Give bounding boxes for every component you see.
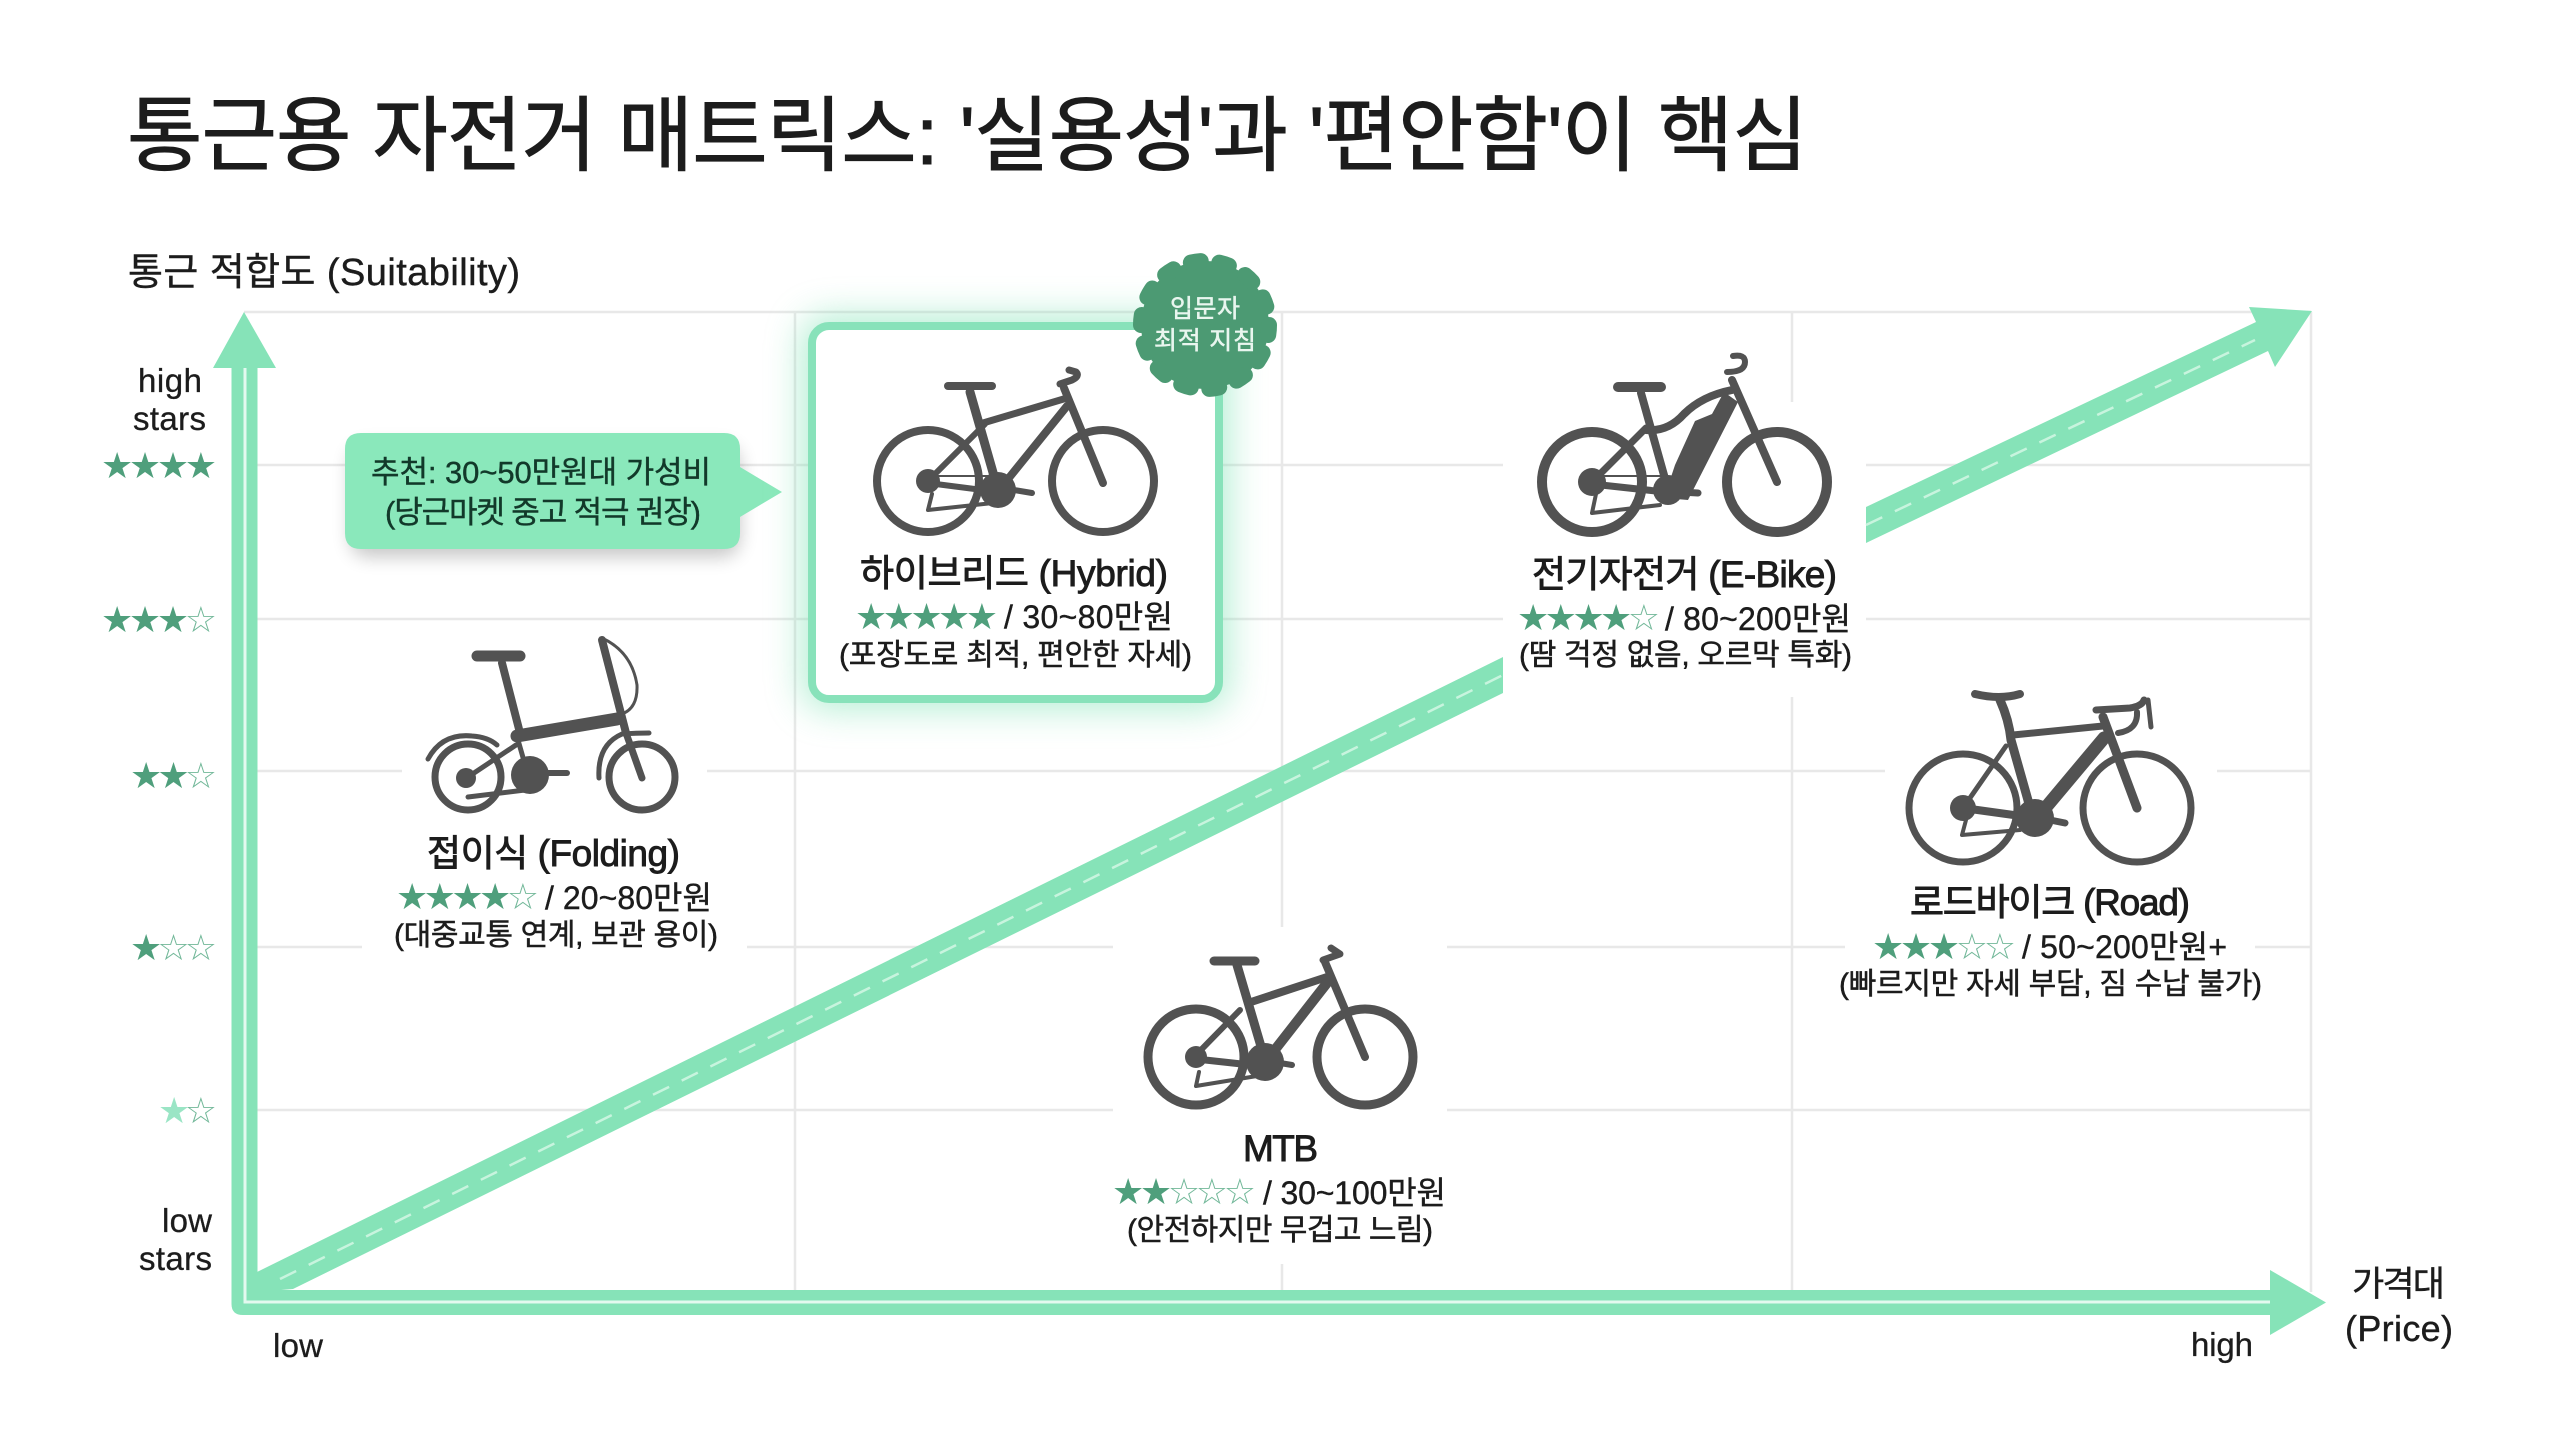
y axis high label	[133, 362, 206, 437]
folding rating and price	[396, 877, 712, 918]
hybrid description: (포장도로 최적, 편안한 자세)	[839, 639, 1192, 672]
road rating and price	[1872, 927, 2227, 968]
y axis star scale: ★☆	[158, 1091, 217, 1132]
y axis star scale	[101, 446, 217, 1132]
hybrid rating and price: ★★★★★	[855, 597, 998, 638]
hybrid rating and price	[855, 597, 1173, 638]
x axis low label: low	[273, 1327, 323, 1364]
y axis star scale: ★☆☆	[130, 928, 217, 969]
road rating and price: / 50~200만원+	[2022, 929, 2227, 965]
diagonal trend arrow: lower segment	[257, 657, 1503, 1292]
folding description: (대중교통 연계, 보관 용이)	[394, 919, 718, 952]
callout: recommendation: (당근마켓 중고 적극 권장)	[385, 495, 701, 530]
MTB name: MTB	[1243, 1128, 1318, 1169]
icon: e-bike	[1542, 356, 1827, 532]
panel: road bike	[1839, 694, 2262, 1001]
y axis title: 통근 적합도 (Suitability)	[128, 252, 520, 294]
badge: beginner pick: 입문자	[1170, 295, 1240, 323]
hybrid name: 하이브리드 (Hybrid)	[860, 553, 1168, 594]
panel: hybrid highlighted card	[802, 316, 1229, 709]
e-bike rating and price: ★★★★☆	[1517, 598, 1660, 639]
title: 통근용 자전거 매트릭스: '실용성'과 '편안함'이 핵심	[127, 91, 1808, 182]
MTB rating and price: ★★☆☆☆	[1112, 1172, 1256, 1213]
e-bike rating and price: / 80~200만원	[1665, 601, 1851, 637]
y axis star scale: ★★★★	[101, 446, 217, 487]
folding name: 접이식 (Folding)	[427, 833, 680, 874]
panel: e-bike	[1517, 356, 1852, 672]
panel: MTB	[1112, 948, 1446, 1247]
icon: road bike	[1909, 694, 2191, 862]
e-bike rating and price	[1517, 598, 1851, 639]
folding rating and price: ★★★★☆	[396, 877, 539, 918]
y axis arrow	[213, 312, 2326, 1335]
MTB rating and price	[1112, 1172, 1446, 1213]
x axis high label: high	[2191, 1326, 2253, 1363]
icon: hybrid bike	[877, 370, 1154, 532]
MTB description: (안전하지만 무겁고 느림)	[1127, 1214, 1433, 1247]
badge: beginner pick	[1141, 261, 1269, 389]
x axis title	[2345, 1265, 2453, 1349]
road rating and price: ★★★☆☆	[1872, 927, 2016, 968]
e-bike name: 전기자전거 (E-Bike)	[1532, 554, 1837, 595]
MTB rating and price: / 30~100만원	[1263, 1175, 1446, 1211]
road description: (빠르지만 자세 부담, 짐 수납 불가)	[1839, 968, 2262, 1001]
folding rating and price: / 20~80만원	[545, 880, 712, 916]
panel: folding bike	[394, 638, 718, 952]
badge: beginner pick: 최적 지침	[1154, 327, 1256, 355]
callout: recommendation	[345, 433, 782, 557]
road name: 로드바이크 (Road)	[1910, 882, 2190, 923]
icon: MTB bike	[1148, 948, 1413, 1105]
y axis star scale: ★★☆	[130, 756, 217, 797]
y axis high label: high	[138, 362, 202, 399]
x axis title: 가격대	[2352, 1265, 2445, 1304]
y axis high label: stars	[133, 400, 206, 437]
callout: recommendation: 추천: 30~50만원대 가성비	[371, 455, 711, 490]
hybrid rating and price: / 30~80만원	[1004, 599, 1173, 635]
diagonal trend arrow: upper segment	[1866, 307, 2312, 543]
y axis low label: stars	[139, 1240, 212, 1277]
y axis low label: low	[162, 1202, 212, 1239]
y axis star scale: ★★★☆	[101, 600, 217, 641]
icon: folding bike	[428, 638, 675, 810]
e-bike description: (땀 걱정 없음, 오르막 특화)	[1519, 639, 1852, 672]
x axis title: (Price)	[2345, 1308, 2453, 1349]
y axis low label	[139, 1202, 212, 1277]
